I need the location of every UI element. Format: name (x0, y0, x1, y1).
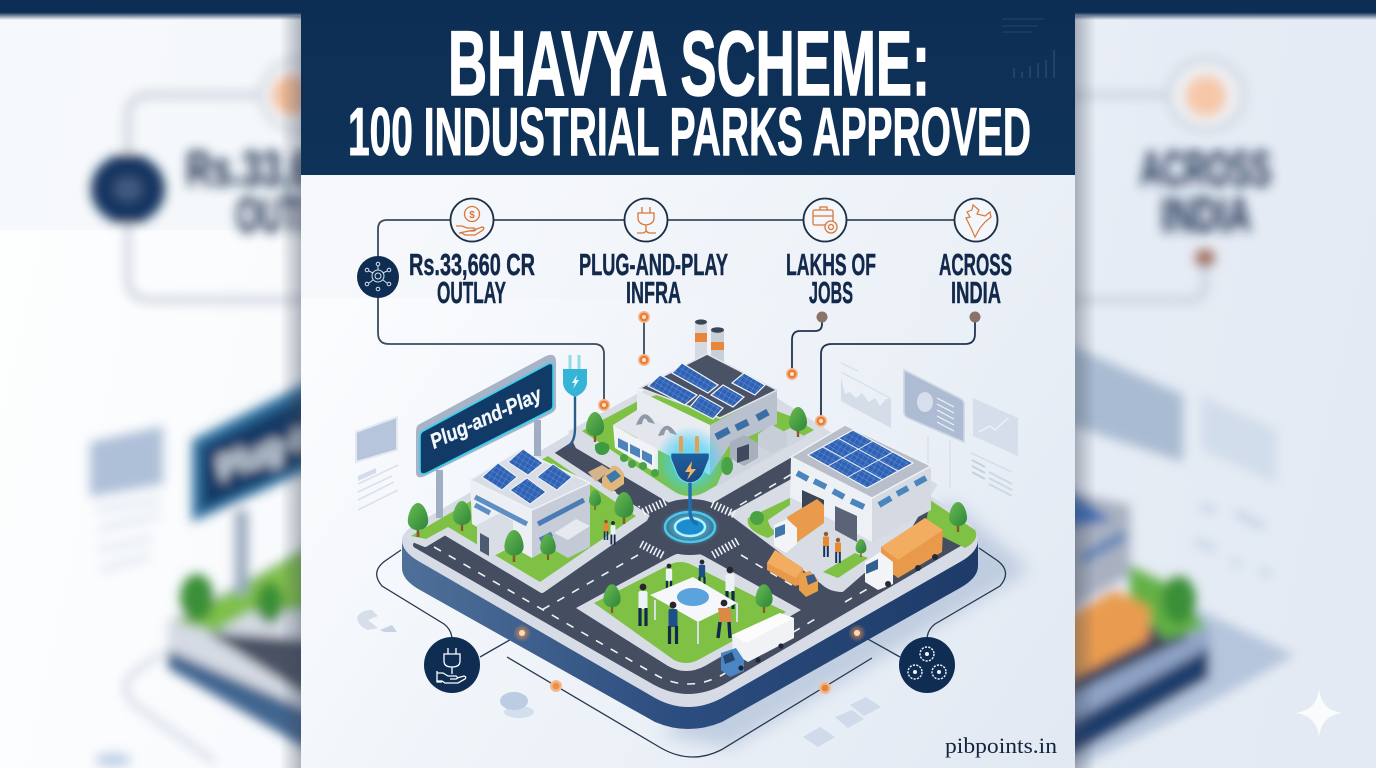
panel: poster background (301, 175, 1075, 768)
connector dots (598, 311, 980, 427)
left lot trees (408, 490, 634, 562)
warehouse trees (750, 502, 967, 557)
label: across India: INDIA (951, 275, 1001, 310)
factory foreground bush and hedges (620, 454, 733, 477)
label: jobs (786, 247, 876, 310)
icon: dark network badge (357, 256, 399, 298)
backdrop top navy band (0, 0, 1376, 20)
faint side graphic: line chart card (973, 398, 1018, 456)
delivery truck on back road (588, 465, 624, 492)
factory solar panels (648, 363, 765, 419)
white and blue truck (721, 613, 794, 677)
large orange truck (865, 518, 943, 590)
connector lines at top (378, 220, 976, 421)
blurred line card (1201, 395, 1277, 484)
label: jobs: LAKHS OF (786, 247, 876, 282)
blurred orange truck (1060, 590, 1150, 685)
left office building with solar roof (470, 449, 590, 558)
billboard posts (436, 420, 541, 518)
backdrop shadow beside poster, left (280, 16, 301, 768)
backdrop left upper band (0, 18, 301, 230)
block: left building lot (408, 452, 647, 590)
icon: plug in hand badge (424, 637, 480, 693)
block: warehouse lot (732, 440, 976, 590)
blurred across India text: INDIA (1161, 187, 1251, 243)
label: outlay: Rs.33,660 CR (409, 247, 535, 282)
blurred warehouse (1060, 485, 1130, 615)
poster (301, 0, 1075, 768)
label: plug-and-play: PLUG-AND-PLAY (579, 247, 728, 282)
blurred dark badge (91, 154, 165, 224)
label: plug-and-play (579, 247, 728, 310)
blurred billboard: Plug-and-Play (209, 370, 421, 489)
people near left lot (604, 520, 615, 544)
blurred backdrop: right side (1060, 60, 1295, 768)
decorative floating shapes (357, 610, 881, 747)
watermark: site name: pibpoints.in (945, 733, 1057, 758)
central glowing plug (654, 426, 726, 524)
blurred across India text: ACROSS (1140, 141, 1271, 197)
label: outlay (409, 247, 535, 310)
icon: sparkle watermark (1295, 689, 1343, 737)
faint side graphic: left card and text lines (356, 417, 398, 510)
trees: back row (586, 407, 807, 455)
blurred tree (1162, 576, 1196, 624)
blurred trees (180, 574, 284, 624)
warehouse workers (823, 532, 841, 563)
blurred outlay text: OUTLAY (236, 187, 360, 243)
blurred platform side (1060, 648, 1209, 762)
label: across India (939, 247, 1012, 310)
lower orange dots (550, 680, 831, 694)
platform side wall (402, 540, 978, 729)
icon: coin in hand (450, 198, 494, 242)
meeting table with team (603, 560, 773, 644)
icon: coin in hand: $ (469, 210, 475, 221)
blurred green lot (1129, 565, 1206, 640)
title line 1: BHAVYA SCHEME: (448, 13, 930, 115)
blurred backdrop: left side (90, 60, 440, 768)
icon: three gears badge (899, 637, 955, 693)
factory with solar roof (613, 319, 787, 475)
platform: isometric park base (402, 372, 978, 729)
blurred floating disc (95, 753, 131, 767)
faint side graphic: pie chart card (904, 370, 964, 442)
block: factory lot (570, 376, 822, 508)
icon: briefcase with gear (804, 198, 846, 242)
factory annex (613, 410, 690, 465)
factory windows (716, 412, 768, 437)
blurred shadow of platform (1066, 610, 1295, 768)
blurred platform (168, 648, 340, 768)
label: plug-and-play: INFRA (626, 275, 681, 310)
billboard frame (416, 355, 556, 477)
warehouse windows and doors (797, 473, 926, 507)
warehouse yard truck (774, 499, 824, 553)
blurred outlay text (186, 141, 413, 243)
block: central meeting lot (576, 552, 801, 671)
header decoration: faint chart (1002, 19, 1054, 78)
blurred road (206, 632, 320, 705)
glow points on platform (513, 624, 866, 642)
orange delivery truck (767, 550, 818, 597)
blurred billboard posts (235, 510, 248, 595)
blurred across India text (1140, 141, 1271, 243)
lower connector lines (377, 548, 1006, 757)
warehouse solar panels (808, 430, 913, 488)
blurred connector frame (128, 95, 310, 300)
table (650, 577, 737, 622)
blurred pie card (1070, 345, 1183, 462)
road dashes (434, 463, 900, 684)
blurred outlay text: Rs.33,660 CR (186, 141, 413, 197)
faint side graphic: bar chart (841, 363, 891, 428)
warehouse with solar roof (790, 425, 931, 542)
road surface (416, 385, 965, 691)
blurred platform rim (168, 540, 320, 715)
blurred lower connector (126, 652, 215, 762)
chimneys (695, 319, 724, 382)
blurred billboard (192, 316, 440, 522)
icon: cyan plug on cord (563, 355, 587, 446)
blurred connector (1066, 95, 1205, 300)
blurred icon circle (261, 60, 337, 130)
backdrop shadow beside poster, right (1075, 16, 1096, 768)
blurred map circle (1169, 60, 1243, 130)
blurred road (1060, 625, 1205, 700)
blurred brown dot (1195, 249, 1215, 267)
platform shadow (660, 500, 1030, 748)
label: across India: ACROSS (939, 247, 1012, 282)
blurred park green (176, 540, 320, 632)
plug-and-play billboard (416, 355, 556, 518)
factory walls (637, 390, 710, 475)
icon: plug (624, 198, 668, 242)
label: jobs: JOBS (809, 275, 853, 310)
blurred data rows (1195, 505, 1270, 575)
icon: India map (954, 198, 998, 242)
blurred faint card (90, 426, 163, 570)
billboard face (420, 363, 553, 474)
roundabout and crosswalks (641, 499, 738, 556)
panel: header (301, 0, 1075, 175)
billboard text: Plug-and-Play (427, 383, 546, 454)
label: outlay: OUTLAY (437, 275, 506, 310)
upper background band (301, 175, 1075, 298)
faint side graphic: data rows (928, 437, 1012, 496)
annex boxes (477, 513, 513, 558)
factory side sheds (730, 435, 758, 466)
blurred platform rim (1060, 628, 1209, 728)
platform rim (402, 372, 978, 707)
